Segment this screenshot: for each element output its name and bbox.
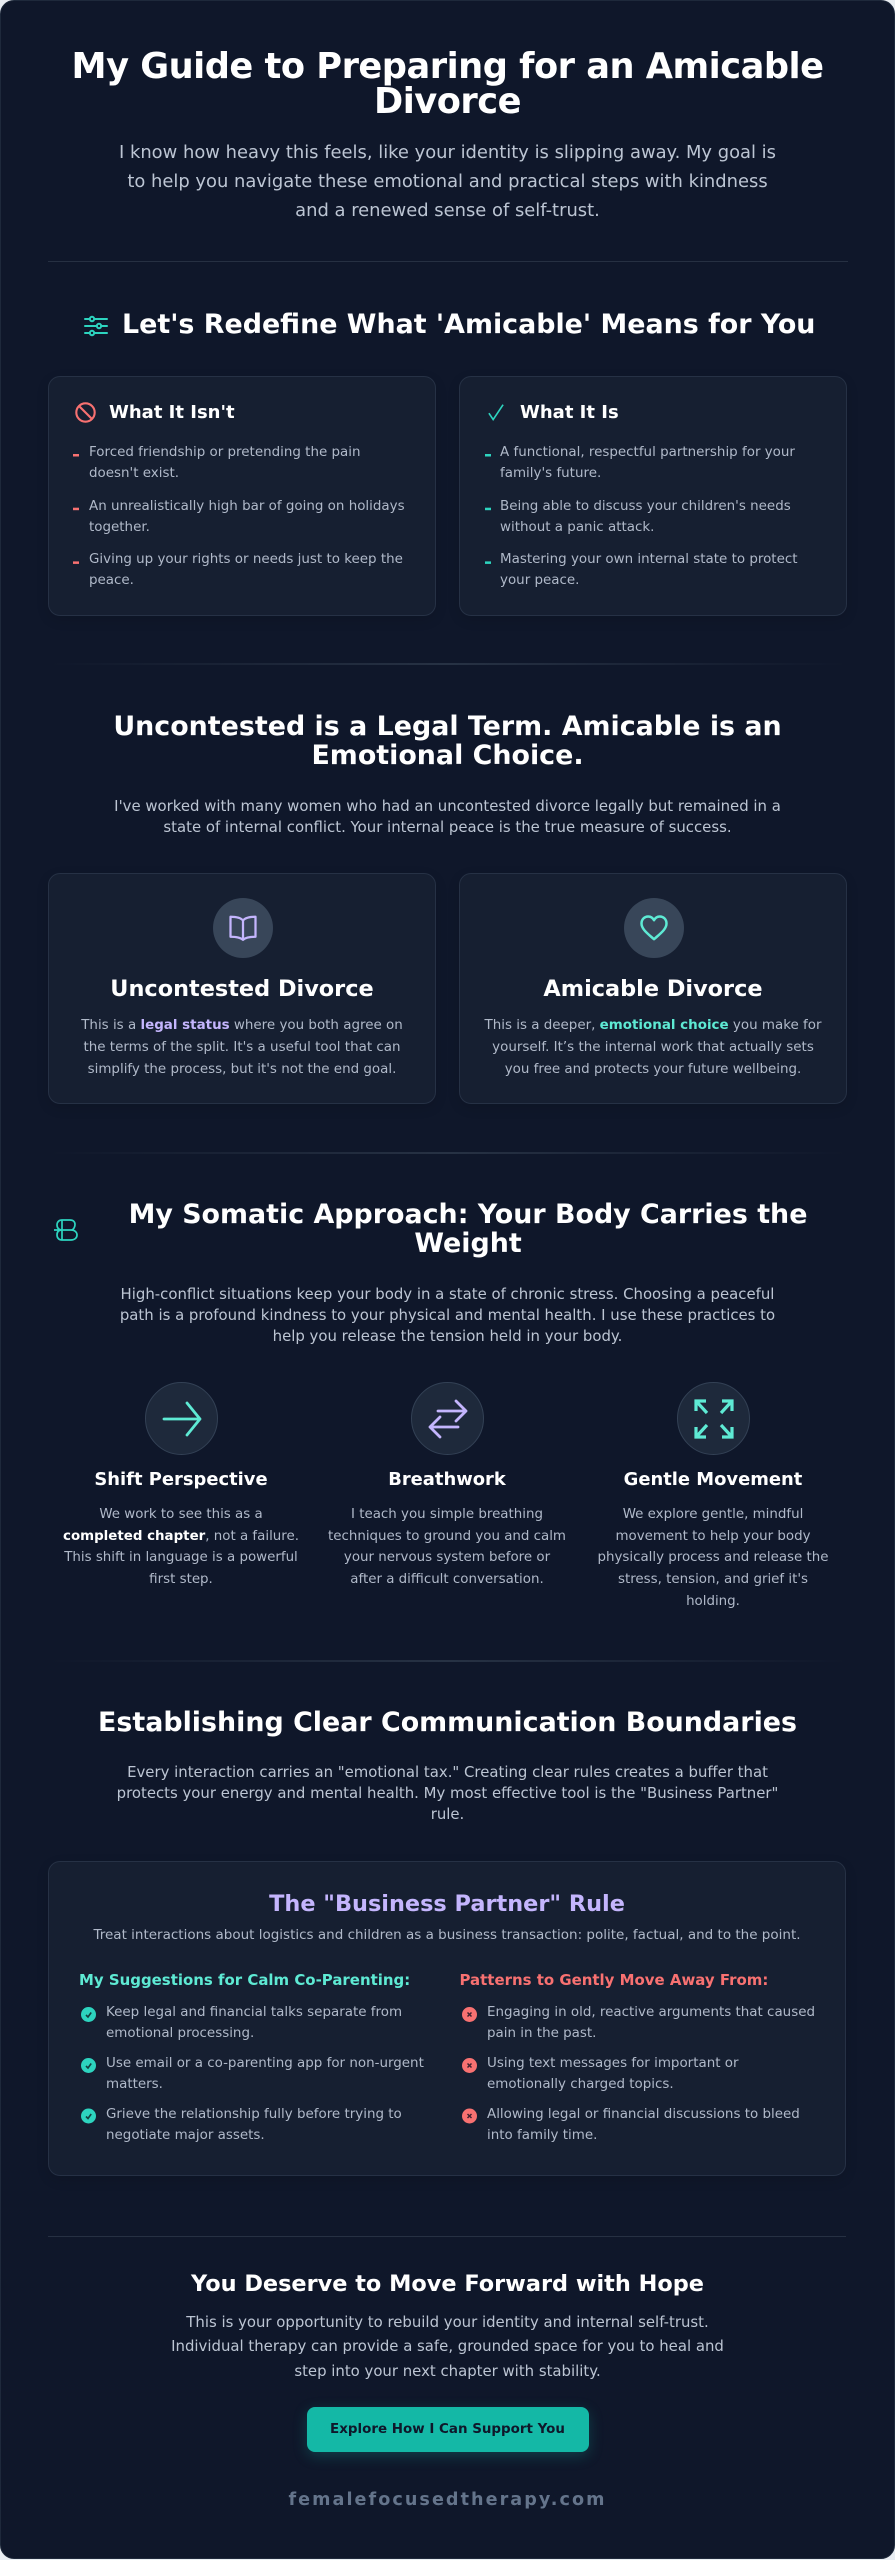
intro: boundaries: Every interaction carries an "emotional tax." Creating clear rules creates a buffer that: [127, 1763, 768, 1781]
icon: somatic: [54, 1219, 78, 1241]
title: [72, 46, 823, 122]
heading: somatic approach: My Somatic Approach: Your Body Carries the: [129, 1199, 807, 1230]
panel subtitle: Treat interactions about logistics and children as a business transaction: polite, factual, and to the point.: [93, 1927, 801, 1943]
intro: somatic: [120, 1285, 775, 1345]
column body: first step.: [149, 1572, 213, 1587]
bullets: [73, 454, 79, 564]
panel: amicable divorce: [459, 873, 847, 1104]
intro: boundaries: rule.: [431, 1805, 464, 1823]
website footer: femalefocusedtherapy.com: [288, 2490, 607, 2510]
call to action button: [306, 2407, 588, 2452]
list: patterns: Engaging in old, reactive arguments that caused: [487, 2005, 815, 2020]
card body: you free and protects your future wellbeing.: [505, 1062, 801, 1077]
list: Forced friendship or pretending the pain: [89, 445, 361, 460]
card body: [484, 1018, 822, 1077]
icon: ban: [75, 402, 96, 423]
column body: This shift in language is a powerful: [64, 1550, 298, 1565]
list: patterns: [487, 2005, 815, 2143]
title: Divorce: [374, 81, 521, 122]
list: suggestions: matters. Grieve the relationship fully before trying to: [106, 2077, 402, 2122]
card body: yourself. It’s the internal work that actually sets: [492, 1040, 814, 1055]
panel: what it is: [459, 376, 847, 616]
column title: Shift Perspective: [94, 1469, 268, 1490]
intro text: to help you navigate these emotional and practical steps with kindness: [127, 171, 768, 192]
icon: arrow right: [144, 1382, 218, 1455]
call to action button: Explore How I Can Support You: [330, 2422, 565, 2437]
list: together. Giving up your rights or needs just to keep the: [89, 520, 403, 567]
column body: We explore gentle, mindful: [623, 1507, 803, 1522]
column: breathwork: [328, 1382, 566, 1587]
heading: uncontested vs amicable: Uncontested is a Legal Term. Amicable is an: [113, 711, 782, 742]
column heading: suggestions: My Suggestions for Calm Co-Parenting:: [79, 1971, 410, 1989]
column body: [328, 1507, 566, 1587]
list: your peace.: [500, 573, 579, 588]
heading: uncontested vs amicable: [113, 711, 782, 771]
list: patterns: pain in the past. Using text messages for important or: [487, 2026, 738, 2071]
column heading: patterns: Patterns to Gently Move Away From:: [460, 1971, 768, 1989]
card body: simplify the process, but it's not the end goal.: [88, 1062, 396, 1077]
card body: the terms of the split. It's a useful tool that can: [83, 1040, 401, 1055]
list: suggestions: Keep legal and financial talks separate from: [106, 2005, 402, 2020]
icon: swap arrows: [411, 1382, 484, 1455]
list: family's future. Being able to discuss your children's needs: [500, 466, 791, 514]
icon: heart: [624, 898, 684, 958]
column body: stress, tension, and grief it's: [618, 1572, 808, 1587]
closing text: step into your next chapter with stability.: [294, 2362, 601, 2380]
column body: holding.: [686, 1594, 740, 1609]
closing text: [171, 2313, 724, 2380]
column body: We work to see this as a: [99, 1507, 263, 1522]
column body: your nervous system before or: [344, 1550, 550, 1565]
card body: [81, 1018, 403, 1077]
column body: after a difficult conversation.: [350, 1572, 544, 1587]
intro: somatic: path is a profound kindness to your physical and mental health. I use these practices to: [120, 1306, 775, 1324]
card heading: What It Is: [520, 402, 619, 423]
heading: redefine amicable: Let's Redefine What 'Amicable' Means for You: [122, 309, 815, 340]
column body: [597, 1507, 829, 1609]
panel: business partner rule: [48, 1861, 846, 2176]
list: suggestions: negotiate major assets.: [106, 2128, 265, 2143]
intro: somatic: help you release the tension held in your body.: [273, 1327, 622, 1345]
heading: uncontested vs amicable: Emotional Choice.: [311, 740, 584, 771]
column body: completed chapter, not a failure.: [63, 1529, 299, 1544]
icon: check: [488, 404, 504, 421]
card body: This is a legal status where you both agree on: [81, 1018, 403, 1033]
column title: Breathwork: [388, 1469, 506, 1490]
list: doesn't exist. An unrealistically high bar of going on holidays: [89, 466, 405, 514]
column title: Gentle Movement: [624, 1469, 802, 1490]
icon: sliders: [84, 316, 108, 336]
list: patterns: emotionally charged topics. Allowing legal or financial discussions to bleed: [487, 2077, 800, 2122]
closing heading: You Deserve to Move Forward with Hope: [191, 2271, 704, 2297]
card body: This is a deeper, emotional choice you make for: [484, 1018, 822, 1033]
column body: techniques to ground you and calm: [328, 1529, 566, 1544]
card title: Uncontested Divorce: [110, 976, 374, 1002]
panel title: The "Business Partner" Rule: [269, 1891, 625, 1917]
intro: uncontested: I've worked with many women who had an uncontested divorce legally but remained in a: [114, 797, 781, 815]
column: gentle movement: [597, 1382, 829, 1609]
bullets: [485, 454, 491, 564]
list: without a panic attack. Mastering your own internal state to protect: [500, 520, 798, 567]
heading: somatic approach: Weight: [414, 1228, 522, 1259]
column body: [63, 1507, 299, 1587]
intro text: and a renewed sense of self-trust.: [295, 200, 600, 221]
intro text: I know how heavy this feels, like your identity is slipping away. My goal is: [119, 142, 776, 163]
column body: physically process and release the: [597, 1550, 829, 1565]
list: [500, 445, 798, 588]
intro: uncontested: [114, 797, 781, 836]
panel: uncontested divorce: [48, 873, 436, 1104]
intro: somatic: High-conflict situations keep your body in a state of chronic stress. Choosing a peaceful: [121, 1285, 774, 1303]
heading: somatic approach: [129, 1199, 807, 1259]
icon: book: [213, 898, 273, 958]
icon: expand arrows: [677, 1382, 750, 1455]
title: My Guide to Preparing for an Amicable: [72, 46, 823, 87]
column body: movement to help your body: [615, 1529, 811, 1544]
closing text: Individual therapy can provide a safe, grounded space for you to heal and: [171, 2337, 724, 2355]
list: A functional, respectful partnership for your: [500, 445, 795, 460]
intro: uncontested: state of internal conflict. Your internal peace is the true measure of success.: [163, 818, 732, 836]
icons: checks: [81, 2007, 96, 2124]
panel: what it isn't: [48, 376, 436, 616]
intro text: [119, 142, 776, 221]
intro: boundaries: [117, 1763, 778, 1823]
heading: boundaries: Establishing Clear Communication Boundaries: [98, 1707, 797, 1738]
intro: boundaries: protects your energy and mental health. My most effective tool is the "Business Partner": [117, 1784, 778, 1802]
card title: Amicable Divorce: [543, 976, 763, 1002]
closing text: This is your opportunity to rebuild your identity and internal self-trust.: [186, 2313, 709, 2331]
column: shift perspective: [63, 1382, 299, 1587]
list: patterns: into family time.: [487, 2128, 597, 2143]
list: [89, 445, 405, 588]
icons: crosses: [462, 2007, 477, 2124]
card heading: What It Isn't: [109, 402, 235, 423]
column body: I teach you simple breathing: [351, 1507, 543, 1522]
list: suggestions: [106, 2005, 424, 2143]
list: peace.: [89, 573, 134, 588]
list: suggestions: emotional processing. Use email or a co-parenting app for non-urgent: [106, 2026, 424, 2071]
